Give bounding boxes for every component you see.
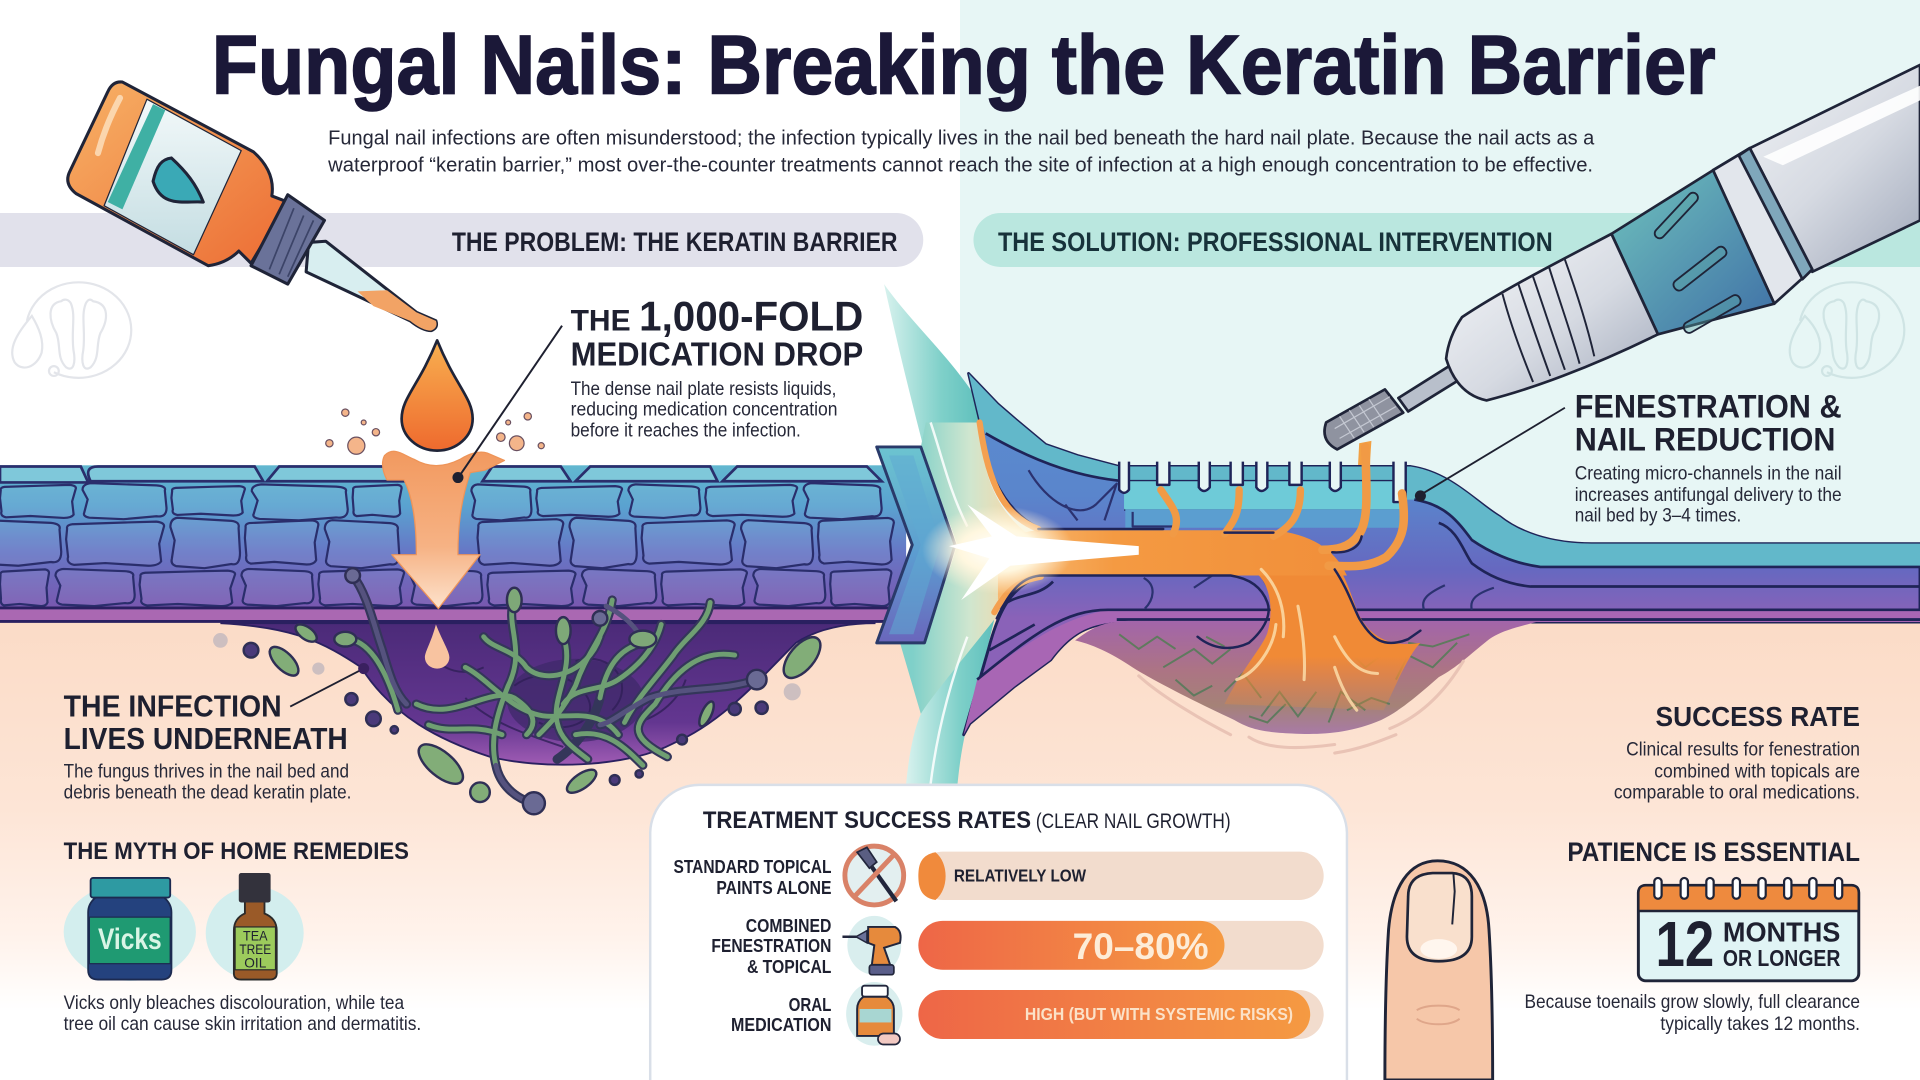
icon: calendar 12 months: [1638, 878, 1859, 981]
intro text: Fungal nail infections are often misunderstood; the infection typically lives in the nail bed beneath the hard nail plate. Because the nail acts as a: [328, 127, 1595, 149]
banner: the problem: [0, 213, 923, 267]
callout: fenestration and nail reduction: NAIL REDUCTION: [1575, 422, 1836, 458]
illustration: medication flow through channels: [980, 422, 1420, 710]
intro text: waterproof “keratin barrier,” most over-the-counter treatments cannot reach the site of infection at a high enough concentration to be effective.: [327, 154, 1593, 176]
text block: success rate: combined with topicals are: [1654, 762, 1860, 783]
callout: infection lives underneath: The fungus thrives in the nail bed and: [64, 762, 349, 783]
illustration: medication arrow and splash: [326, 340, 544, 669]
row labels: PAINTS ALONE: [716, 877, 831, 898]
icon: tea tree oil bottle: TREE: [239, 941, 271, 957]
illustration: dropper bottle: [68, 82, 437, 331]
bar: combined fenestration and topical: 70–80%: [1073, 926, 1209, 967]
illustration: left nail plate: [0, 465, 906, 622]
text block: success rate: Clinical results for fenestration: [1626, 740, 1860, 761]
text block: success rate: comparable to oral medications.: [1614, 782, 1860, 803]
text block: clearance note: [1524, 992, 1860, 1035]
callout: 1,000-fold medication drop: THE: [571, 305, 631, 338]
text block: success rate: SUCCESS RATE: [1656, 701, 1860, 732]
callout: fenestration and nail reduction: increases antifungal delivery to the: [1575, 485, 1842, 506]
row labels: & TOPICAL: [747, 956, 831, 977]
icon: medication bottle: [846, 982, 902, 1046]
text block: clearance note: Because toenails grow slowly, full clearance: [1524, 992, 1860, 1013]
text block: patience is essential: PATIENCE IS ESSENTIAL: [1567, 837, 1860, 867]
icon: tea tree oil bottle: TEA: [243, 927, 268, 943]
callout: 1,000-fold medication drop: [452, 293, 863, 483]
text block: success rate: [1614, 701, 1860, 803]
illustration: finger with nail: [1385, 861, 1493, 1080]
callout: 1,000-fold medication drop: MEDICATION DROP: [571, 337, 863, 374]
banner: the solution: THE SOLUTION: PROFESSIONAL INTERVENTION: [998, 227, 1553, 257]
callout: fenestration and nail reduction: [1415, 389, 1842, 527]
text block: clearance note: typically takes 12 months.: [1660, 1014, 1860, 1035]
callout: 1,000-fold medication drop: reducing medication concentration: [571, 399, 838, 421]
panel heading: [703, 807, 1231, 834]
panel: treatment success rates: [650, 785, 1347, 1080]
illustration: right nail after fenestration: [964, 373, 1920, 735]
row labels: MEDICATION: [731, 1014, 831, 1035]
callout: fenestration and nail reduction: FENESTRATION &: [1575, 389, 1842, 425]
callout: 1,000-fold medication drop: 1,000-FOLD: [639, 293, 863, 340]
section: myth of home remedies: tree oil can cause skin irritation and dermatitis.: [64, 1014, 421, 1035]
icon: foot watermark right: [1790, 282, 1904, 378]
bar: standard topical paints alone: [918, 852, 1324, 900]
icon: foot watermark left: [12, 282, 131, 378]
illustration: fungal infection under the nail: [213, 568, 876, 814]
panel heading: (CLEAR NAIL GROWTH): [1036, 809, 1231, 833]
row labels: ORAL: [789, 994, 831, 1015]
callout: fenestration and nail reduction: Creating micro-channels in the nail: [1575, 463, 1842, 484]
channels cut in the nail: [1119, 462, 1406, 502]
bar: oral medication: HIGH (BUT WITH SYSTEMIC RISKS): [1025, 1004, 1293, 1024]
banner: the problem: THE PROBLEM: THE KERATIN BARRIER: [452, 227, 898, 257]
teal divider swoosh: [884, 284, 1035, 784]
icon: vicks jar: [64, 878, 196, 981]
callout: 1,000-fold medication drop: The dense nail plate resists liquids,: [571, 378, 836, 400]
callout: fenestration and nail reduction: nail bed by 3–4 times.: [1575, 506, 1741, 527]
callout: infection lives underneath: LIVES UNDERNEATH: [64, 722, 348, 756]
row labels: COMBINED: [746, 915, 831, 936]
title: Fungal Nails: Breaking the Keratin Barrier: [212, 19, 1716, 112]
icon: drill: [842, 916, 901, 975]
callout: infection lives underneath: debris beneath the dead keratin plate.: [64, 782, 351, 803]
callout: infection lives underneath: [64, 663, 369, 803]
bar: oral medication: [918, 990, 1324, 1039]
illustration: infected nail bed: [1075, 621, 1540, 753]
icon: calendar 12 months: 12: [1656, 909, 1714, 980]
bar: combined fenestration and topical: [918, 921, 1324, 970]
callout: 1,000-fold medication drop: before it reaches the infection.: [571, 420, 801, 442]
row labels: [673, 856, 831, 1035]
spores: [213, 621, 827, 802]
callout: infection lives underneath: THE INFECTION: [64, 689, 282, 723]
banner: the solution: [973, 213, 1920, 267]
row labels: FENESTRATION: [711, 935, 831, 956]
icon: calendar 12 months: OR LONGER: [1723, 945, 1840, 971]
bar: standard topical paints alone: RELATIVELY LOW: [954, 866, 1087, 886]
section: myth of home remedies: Vicks only bleaches discolouration, while tea: [64, 993, 404, 1014]
section: myth of home remedies: THE MYTH OF HOME REMEDIES: [64, 838, 409, 865]
row labels: STANDARD TOPICAL: [673, 856, 831, 877]
illustration: drill: [1325, 65, 1920, 536]
icon: tea tree oil bottle: [206, 873, 304, 980]
icon: vicks jar: Vicks: [98, 923, 162, 956]
burst of light: [922, 504, 1139, 600]
section: myth of home remedies: [64, 838, 421, 1035]
chevron arrow: [877, 447, 955, 643]
icon: calendar 12 months: MONTHS: [1723, 917, 1840, 948]
panel heading: TREATMENT SUCCESS RATES: [703, 807, 1031, 834]
icon: tea tree oil bottle: OIL: [244, 954, 266, 970]
fungal hyphae: [334, 568, 767, 814]
intro text: [327, 127, 1595, 176]
icon: no topical paints: [845, 846, 904, 905]
